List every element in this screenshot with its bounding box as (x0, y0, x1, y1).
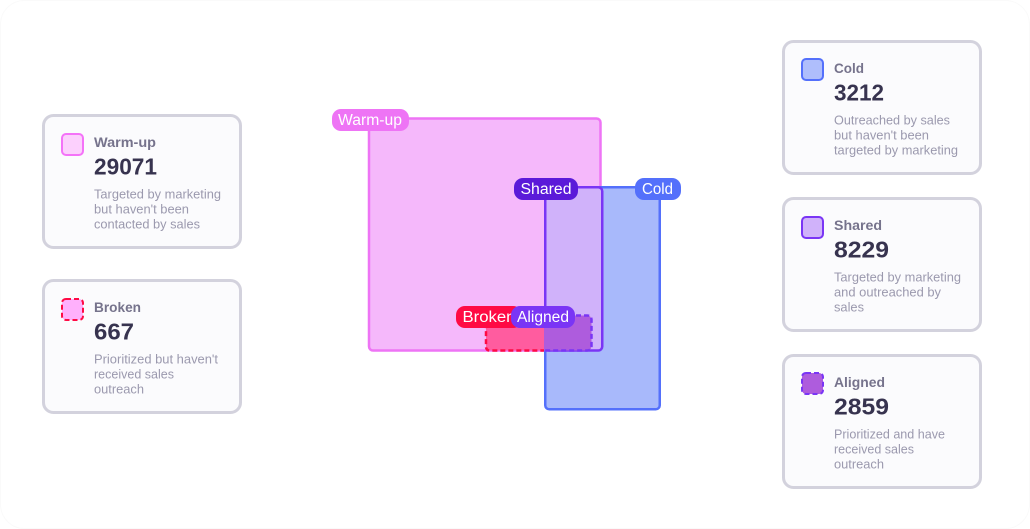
label: Cold: Cold (642, 181, 673, 198)
Shared card text: sales (834, 300, 864, 314)
Aligned card text: Aligned (834, 374, 885, 390)
label: Shared: Shared (520, 181, 572, 198)
Broken card text: Prioritized but haven't (94, 352, 219, 366)
Broken card text: outreach (94, 382, 144, 396)
icon: Shared swatch (802, 217, 823, 238)
icon: Warm-up swatch (62, 134, 83, 155)
Aligned card text: 2859 (834, 394, 889, 420)
label: Cold (635, 178, 681, 200)
Broken card text: Broken (94, 299, 141, 315)
label: Broken: Broken (462, 309, 516, 326)
label: Aligned (511, 306, 575, 328)
Cold card text: Cold (834, 60, 864, 76)
Warm-up card text: 29071 (94, 154, 157, 180)
Shared card text: Shared (834, 217, 882, 233)
Cold card text: Outreached by sales (834, 114, 950, 128)
label: Shared (514, 178, 578, 200)
Warm-up region (369, 118, 600, 350)
Cold card text: targeted by marketing (834, 144, 958, 158)
Warm-up card text: Targeted by marketing (94, 188, 221, 202)
label: Aligned: Aligned (517, 309, 569, 326)
Aligned region (544, 316, 592, 350)
icon: Cold swatch (802, 59, 823, 80)
Aligned card text: Prioritized and have (834, 428, 945, 442)
Cold card text: but haven't been (834, 128, 929, 142)
Cold card text: 3212 (834, 80, 884, 106)
Cold card text (834, 60, 958, 158)
icon: Aligned swatch (802, 373, 823, 394)
label: Broken (456, 306, 522, 328)
panel: Cold (784, 42, 980, 174)
Shared card text (834, 217, 961, 314)
Warm-up card text: contacted by sales (94, 218, 200, 232)
Warm-up card text: Warm-up (94, 134, 156, 150)
Shared card text: 8229 (834, 236, 889, 262)
panel: Broken (44, 280, 240, 412)
chart: overlapping segments diagram (332, 109, 681, 409)
Shared card text: Targeted by marketing (834, 270, 961, 284)
panel: Warm-up (44, 116, 240, 248)
Warm-up card text (94, 134, 221, 232)
Shared region (545, 187, 602, 350)
Cold region (545, 187, 660, 409)
Aligned card text: received sales (834, 442, 914, 456)
Aligned card text (834, 374, 945, 472)
label: Warm-up (332, 109, 409, 131)
Broken card text: received sales (94, 368, 174, 382)
Warm-up card text: but haven't been (94, 202, 189, 216)
Broken card text: 667 (94, 318, 134, 344)
icon: Broken swatch (62, 299, 83, 320)
panel: Shared (784, 198, 980, 330)
panel: Aligned (784, 356, 980, 488)
Aligned card text: outreach (834, 458, 884, 472)
Broken region (486, 316, 544, 350)
label: Warm-up: Warm-up (338, 112, 402, 129)
Shared card text: and outreached by (834, 286, 942, 300)
Broken card text (94, 299, 219, 396)
